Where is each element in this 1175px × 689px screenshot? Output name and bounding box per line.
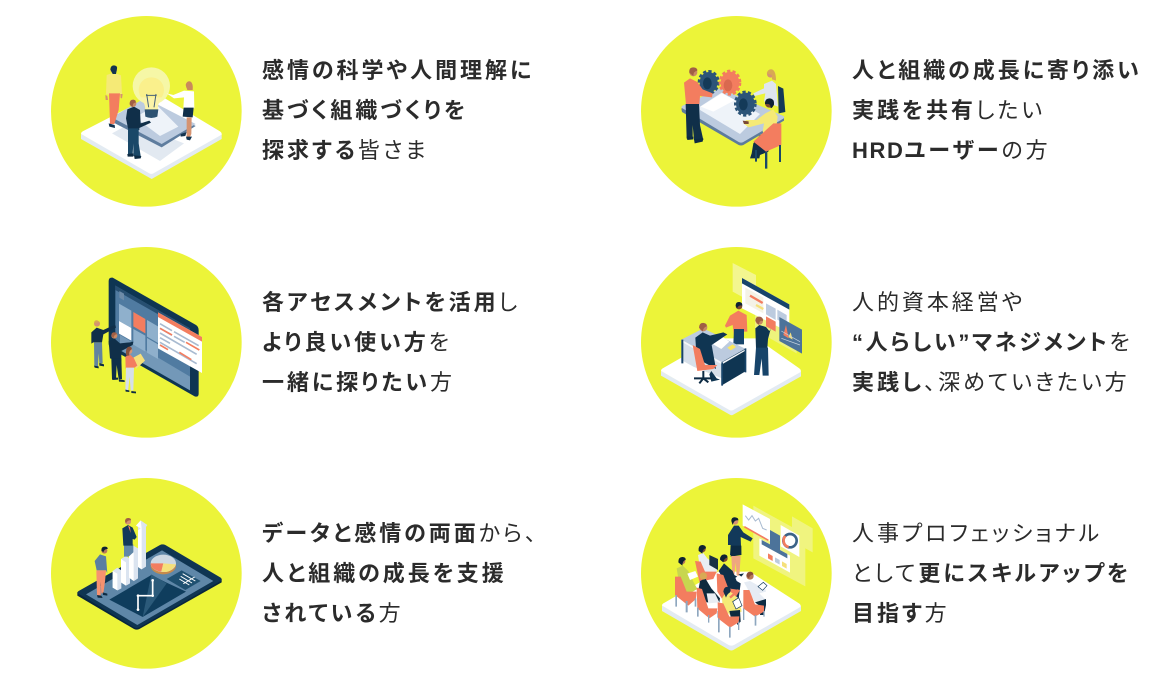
text: assessment users: より良い使い方を (262, 330, 452, 355)
text: data and emotion: 人と組織の成長を支援 (262, 561, 507, 586)
icon: tablet with charts (51, 478, 242, 669)
panel: HRD users (641, 16, 1142, 207)
text: assessment users: 各アセスメントを活用し (262, 290, 520, 315)
panel: data and emotion (51, 478, 539, 669)
text: HR professionals: 人事プロフェッショナル (852, 521, 1102, 546)
text: HRD users: 実践を共有したい (852, 98, 1045, 123)
text: data and emotion: データと感情の両面から、 (262, 521, 539, 546)
text: data and emotion (262, 521, 539, 626)
text: emotion science (262, 58, 534, 163)
text: human capital management (852, 290, 1133, 395)
text: data and emotion: されている方 (262, 601, 404, 626)
text: assessment users: 一緒に探りたい方 (262, 370, 455, 395)
text: emotion science: 感情の科学や人間理解に (262, 58, 534, 83)
text: HRD users: 人と組織の成長に寄り添い (852, 58, 1142, 83)
text: assessment users (262, 290, 520, 395)
panel: human capital management (641, 247, 1133, 438)
panel: HR professionals (641, 478, 1131, 669)
text: HR professionals (852, 521, 1131, 626)
icon: gears and team (641, 16, 832, 207)
icon: light bulb on table (51, 16, 242, 207)
text: HRD users: HRDユーザーの方 (852, 138, 1051, 163)
panel: emotion science (51, 16, 534, 207)
text: emotion science: 基づく組織づくりを (262, 98, 468, 123)
text: emotion science: 探求する皆さま (262, 138, 429, 163)
icon: big tablet and people (51, 247, 242, 438)
text: HRD users (852, 58, 1142, 163)
text: HR professionals: として更にスキルアップを (852, 561, 1131, 586)
text: human capital management: 実践し、深めていきたい方 (852, 370, 1130, 395)
text: human capital management: 人的資本経営や (852, 290, 1025, 315)
text: HR professionals: 目指す方 (852, 601, 950, 626)
icon: office meeting on platform (641, 247, 832, 438)
icon: seminar on platform (641, 478, 832, 669)
text: human capital management: “人らしい”マネジメントを (852, 330, 1133, 355)
panel: assessment users (51, 247, 520, 438)
